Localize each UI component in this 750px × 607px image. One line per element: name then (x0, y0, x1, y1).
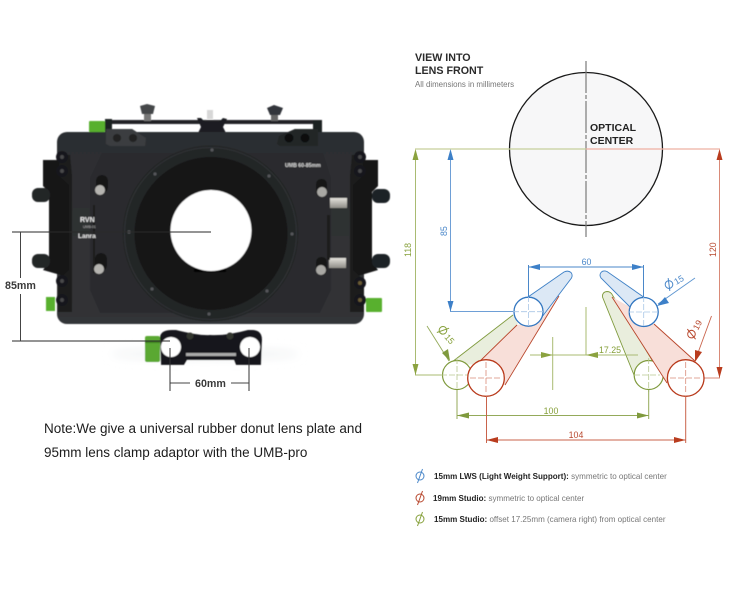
title: view into lens front: VIEW INTO (415, 52, 471, 64)
dimension: 60 blue (528, 257, 644, 297)
blue channel left (528, 271, 572, 317)
circle blue right (629, 298, 658, 326)
red dimension 120 (586, 149, 722, 378)
rod channels: left side (441, 271, 572, 396)
dimension: 60mm (170, 348, 249, 391)
dimension: phi 19 red: 19 (691, 318, 704, 332)
blue channel right (600, 271, 645, 307)
dimension: phi 15 green: 15 (443, 332, 457, 346)
left side flag (32, 151, 72, 312)
green centerlines right (634, 358, 660, 392)
dimension: phi 15 green (427, 323, 458, 361)
lens ring (122, 146, 298, 322)
lens circle with optical center: OPTICAL (590, 122, 637, 134)
thumb screws (94, 175, 327, 275)
title: view into lens front (415, 52, 514, 89)
green channel left (452, 315, 518, 365)
dimension: phi 19 red (684, 316, 712, 362)
brand and model labels (78, 163, 321, 240)
dimension: 85mm (5, 232, 211, 341)
dimension: 100 green (457, 390, 649, 419)
dimension: 104 red (486, 396, 686, 443)
right side flag (350, 151, 390, 312)
top cheek blocks (106, 129, 318, 146)
dimension: phi 15 blue: 15 (672, 273, 686, 287)
dimension: 17.25 offset: 17.25 (599, 345, 621, 355)
brand and model labels: UMB-01 (83, 225, 96, 229)
red dimension 120: 120 (708, 242, 718, 257)
ground shadow (110, 349, 300, 359)
dimension: 17.25 offset (530, 307, 638, 390)
dimension: 60mm: 60mm (195, 378, 226, 390)
legend row: 19mm Studio (416, 491, 584, 505)
note text: Note:We give a universal rubber donut lens plate and (44, 421, 362, 436)
legend (416, 469, 667, 526)
dimension: 100 green: 100 (544, 406, 558, 416)
legend row: 15mm LWS (416, 469, 667, 483)
note text: 95mm lens clamp adaptor with the UMB-pro (44, 445, 307, 460)
dimension: 104 red: 104 (569, 430, 583, 440)
red channel left (476, 296, 559, 385)
circle red right (667, 360, 704, 396)
circle blue left (514, 297, 543, 326)
title: view into lens front: All dimensions in millimeters (415, 80, 514, 89)
legend row: 15mm LWS: 15mm LWS (Light Weight Support): symmetric to optical center (434, 472, 667, 481)
circle red left (468, 360, 504, 396)
blue dimension 85: 85 (439, 226, 449, 236)
note text (44, 421, 362, 460)
dimension: 60 blue: 60 (582, 257, 591, 267)
front plate (90, 153, 331, 313)
product photo: matte box (32, 104, 390, 365)
brand and model labels: RVN (80, 217, 95, 224)
legend row: 15mm Studio (416, 512, 666, 526)
lens circle with optical center: CENTER (590, 135, 634, 147)
lens circle with optical center (510, 61, 662, 237)
legend row: 19mm Studio: 19mm Studio: symmetric to optical center (433, 494, 584, 503)
top rail with knobs (89, 104, 322, 146)
title: view into lens front: LENS FRONT (415, 65, 484, 77)
dimension: 85mm: 85mm (5, 280, 36, 292)
brand and model labels: Lanra (78, 233, 96, 240)
circle green right (634, 360, 663, 390)
rod bracket (145, 330, 262, 365)
dimension: phi 15 blue (657, 271, 695, 306)
blue dimension 85 (439, 149, 514, 312)
red channel right (612, 297, 695, 383)
lens opening (170, 190, 252, 272)
green channel right (602, 292, 652, 375)
green dimension 118 (403, 149, 586, 375)
matte box body (57, 132, 364, 324)
green dimension 118: 118 (403, 243, 413, 257)
rod channels: right side (600, 271, 704, 396)
brand and model labels: UMB 60-85mm (285, 163, 321, 169)
circle green left (442, 360, 472, 390)
silver pins (93, 198, 347, 273)
legend row: 15mm Studio: 15mm Studio: offset 17.25mm (camera right) from optical center (434, 515, 666, 524)
